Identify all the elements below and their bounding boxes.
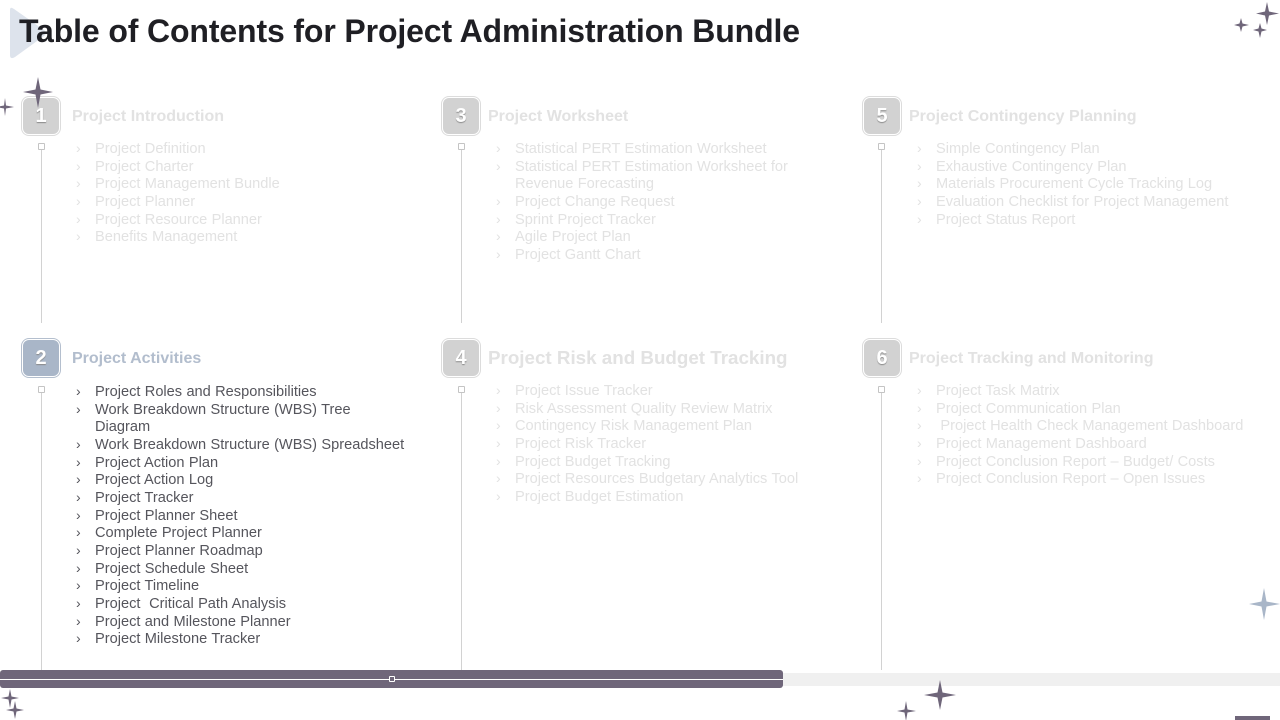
list 1: Project Management Bundle [95, 176, 280, 192]
number badge 6 [864, 340, 900, 376]
number badge 3: 3 [455, 105, 467, 127]
panel 5: Project Contingency Planning [862, 96, 1228, 323]
timeline 3 [461, 147, 462, 323]
number badge 1 [23, 98, 59, 134]
progress fill [0, 670, 783, 688]
list 4: Contingency Risk Management Plan [515, 418, 752, 434]
timeline 5 [881, 147, 882, 323]
decorative triangle behind title [10, 8, 46, 58]
number badge 2 [23, 340, 59, 376]
list 5 [918, 141, 1228, 228]
panel 1: Project Introduction [21, 96, 280, 323]
list 5: Project Status Report [936, 212, 1075, 228]
heading 1: Project Introduction [72, 108, 224, 125]
heading 4: Project Risk and Budget Tracking [488, 347, 788, 368]
list 3: Agile Project Plan [515, 229, 631, 245]
list 5: Evaluation Checklist for Project Management [936, 194, 1228, 210]
list 6: Project Health Check Management Dashboard [940, 418, 1243, 434]
list 3: Revenue Forecasting [515, 176, 654, 192]
list 5: Exhaustive Contingency Plan [936, 159, 1126, 175]
number badge 3 [443, 98, 479, 134]
number badge 5 [864, 98, 900, 134]
list 6: Project Conclusion Report – Budget/ Costs [936, 454, 1215, 470]
node 4 [458, 386, 465, 393]
list 2: Project Tracker [95, 490, 193, 506]
sparkle: right side [1250, 588, 1280, 620]
node 6 [878, 386, 885, 393]
node 2 [38, 386, 45, 393]
list 2: Work Breakdown Structure (WBS) Tree [95, 402, 351, 418]
list 3: Statistical PERT Estimation Worksheet for [515, 159, 788, 175]
list 3: Sprint Project Tracker [515, 212, 656, 228]
list 5: Materials Procurement Cycle Tracking Log [936, 176, 1212, 192]
node 1 [38, 143, 45, 150]
list 2: Project Milestone Tracker [95, 631, 260, 647]
list 6: Project Communication Plan [936, 401, 1121, 417]
node 3 [458, 143, 465, 150]
panel 6: Project Tracking and Monitoring [862, 338, 1243, 670]
timeline 4 [461, 389, 462, 670]
footer tab [1235, 716, 1270, 720]
list 4: Project Risk Tracker [515, 436, 646, 452]
sparkles: top left [0, 77, 53, 116]
number badge 4 [443, 340, 479, 376]
list 2: Project Critical Path Analysis [95, 596, 286, 612]
list 4 [496, 383, 798, 505]
heading 3: Project Worksheet [488, 108, 628, 125]
heading 6: Project Tracking and Monitoring [909, 350, 1153, 367]
list 1: Project Charter [95, 159, 193, 175]
list 2: Diagram [95, 419, 150, 435]
list 2: Project Action Plan [95, 455, 218, 471]
list 6 [918, 383, 1243, 487]
list 2 [76, 384, 404, 647]
progress track [0, 673, 1280, 686]
panel 3: Project Worksheet [441, 96, 788, 323]
panel 2: Project Activities [21, 338, 404, 670]
list 2: Project Action Log [95, 472, 213, 488]
list 1 [76, 141, 280, 245]
sparkles: bottom left [1, 689, 24, 719]
number badge 6: 6 [876, 347, 888, 369]
list 4: Project Issue Tracker [515, 383, 653, 399]
list 3: Project Gantt Chart [515, 247, 641, 263]
timeline 2 [41, 389, 42, 670]
panel 4: Project Risk and Budget Tracking [441, 338, 798, 670]
list 6: Project Task Matrix [936, 383, 1060, 399]
list 4: Project Budget Estimation [515, 489, 684, 505]
heading 5: Project Contingency Planning [909, 108, 1137, 125]
number badge 5: 5 [876, 105, 888, 127]
list 5: Simple Contingency Plan [936, 141, 1100, 157]
list 1: Benefits Management [95, 229, 237, 245]
list 2: Work Breakdown Structure (WBS) Spreadsheet [95, 437, 404, 453]
timeline 6 [881, 389, 882, 670]
list 2: Project Timeline [95, 578, 199, 594]
list 4: Project Budget Tracking [515, 454, 671, 470]
list 3 [496, 141, 788, 263]
list 2: Project Planner Roadmap [95, 543, 263, 559]
progress bar [0, 670, 1280, 688]
node 5 [878, 143, 885, 150]
list 1: Project Definition [95, 141, 206, 157]
sparkles: bottom centre [897, 680, 956, 720]
list 1: Project Resource Planner [95, 212, 262, 228]
list 2: Complete Project Planner [95, 525, 262, 541]
list 2: Project and Milestone Planner [95, 614, 291, 630]
number badge 4: 4 [455, 347, 467, 369]
list 4: Risk Assessment Quality Review Matrix [515, 401, 772, 417]
list 6: Project Management Dashboard [936, 436, 1147, 452]
number badge 2: 2 [35, 347, 47, 369]
list 2: Project Roles and Responsibilities [95, 384, 317, 400]
list 3: Project Change Request [515, 194, 675, 210]
list 2: Project Schedule Sheet [95, 561, 248, 577]
progress centre line [0, 679, 783, 680]
list 2: Project Planner Sheet [95, 508, 238, 524]
list 6: Project Conclusion Report – Open Issues [936, 471, 1205, 487]
title: Table of Contents for Project Administration Bundle [19, 13, 800, 49]
list 4: Project Resources Budgetary Analytics Tool [515, 471, 798, 487]
number badge 1: 1 [35, 105, 47, 127]
heading 2: Project Activities [72, 350, 201, 367]
timeline 1 [41, 147, 42, 323]
list 3: Statistical PERT Estimation Worksheet [515, 141, 767, 157]
list 1: Project Planner [95, 194, 195, 210]
sparkles: top right [1234, 2, 1279, 38]
progress marker [389, 676, 395, 682]
